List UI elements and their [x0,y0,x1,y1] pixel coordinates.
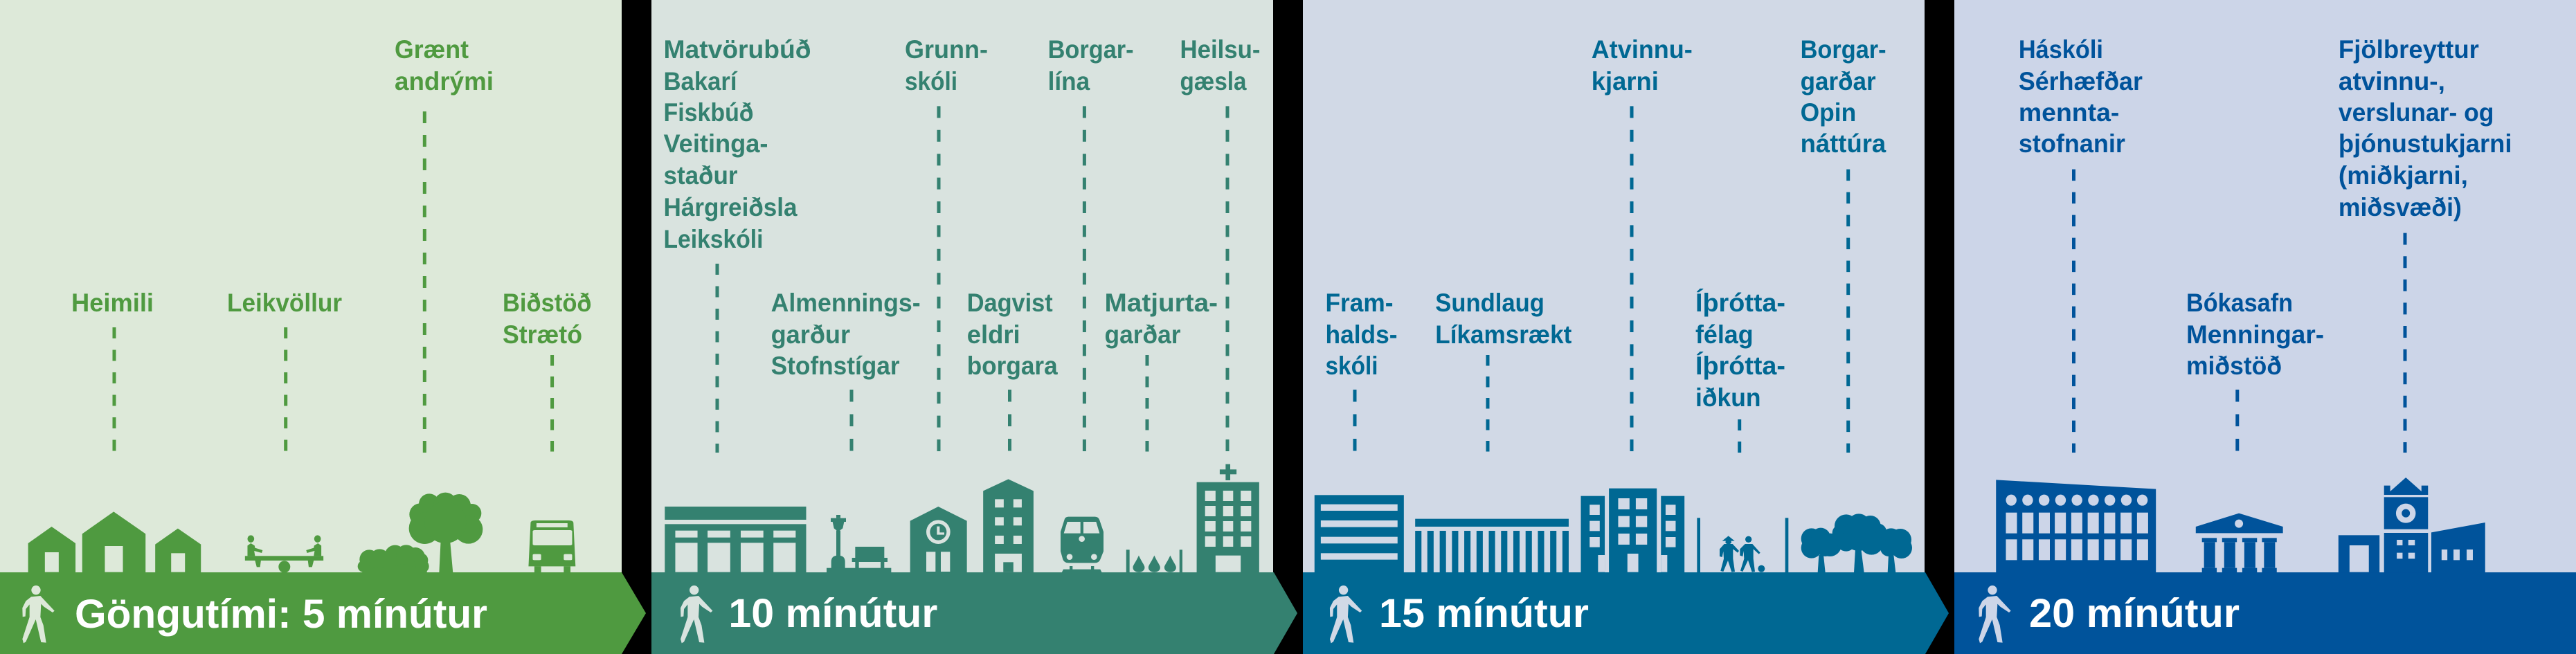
label: Matjurtagarðar: garðar [1105,320,1181,349]
label: Bókasafn Menningarmiðstöð: Menningar- [2186,320,2324,349]
leader line: Grænt andrými [423,111,426,453]
label: Framhaldsskóli: skóli [1325,352,1378,380]
label: Háskóli Sérhæfðar menntastofnanir: mennta- [2019,98,2119,127]
icon: university [1996,480,2156,572]
label: Grunnskóli: Grunn- [905,35,988,64]
icon: swimming hall [1415,519,1569,572]
leader line: Bókasafn [2235,390,2239,453]
label: shops list: Fiskbúð [663,98,753,127]
label: Borgarlína: Borgar- [1048,35,1134,64]
leader line: Leikvöllur [284,327,287,453]
label: Borgarlína [1048,35,1134,96]
label: Heilsugæsla: gæsla [1180,67,1247,96]
icon: park trees [1801,514,1912,572]
banner heading: 20 mínútur [2029,591,2240,636]
leader line: Háskóli [2072,170,2075,453]
label: Bókasafn Menningarmiðstöð: miðstöð [2186,352,2282,380]
label: Fjölbreyttur kjarni: verslunar- og [2339,98,2494,127]
icon: town centre with clock tower [2339,478,2485,572]
label: Íþróttafélag Íþróttaiðkun [1695,289,1785,412]
leader line: Atvinnukjarni [1630,106,1634,453]
banner arrow: Göngutími 5 mínútur [0,572,646,654]
label: Biðstöð Strætó [503,289,591,349]
leader line: Íþróttafélag [1738,419,1741,453]
label: Heilsugæsla [1180,35,1260,96]
icon: train [1061,517,1104,573]
icon: bush and tree [358,493,483,573]
leader line: Framhaldsskóli [1353,390,1357,453]
label: Borgarlína: lína [1048,67,1090,96]
icons: sports and park [1697,514,1912,573]
leader line: Biðstöð [550,355,554,453]
label: Borgargarðar Opin náttúra: náttúra [1801,129,1886,158]
label: Íþróttafélag Íþróttaiðkun: iðkun [1695,383,1761,412]
panel: 5 minutes [0,0,646,654]
panel: 15 minutes [1303,0,1949,654]
label: Biðstöð Strætó: Biðstöð [503,289,591,317]
label: Háskóli Sérhæfðar menntastofnanir: stofnanir [2019,129,2125,158]
icon: seesaw playground [245,535,323,573]
label: Atvinnukjarni: Atvinnu- [1592,35,1693,64]
label: Íþróttafélag Íþróttaiðkun: félag [1695,320,1754,349]
label: Háskóli Sérhæfðar menntastofnanir: Háskóli [2019,35,2103,64]
label: shops list: Bakarí [663,67,738,96]
panel: 20 minutes [1954,0,2576,654]
label: Fjölbreyttur kjarni [2339,35,2512,221]
label: Almenningsgarður Stofnstígar [771,289,921,380]
label: shops list [663,35,811,253]
label: Dagvist eldri borgara [967,289,1058,380]
icon: walking person [22,585,55,643]
banner heading: Göngutími: 5 mínútur [75,592,487,637]
icons: panel 4 skyline [1996,478,2485,572]
leader line: Almenningsgarður [850,390,853,453]
icon: hospital [1197,464,1259,572]
label: Fjölbreyttur kjarni: (miðkjarni, [2339,161,2468,190]
leader line: Heilsugæsla [1225,106,1230,453]
label: Heimili: Heimili [71,289,154,317]
label: Framhaldsskóli [1325,289,1397,380]
icon: vegetable garden [1126,549,1182,572]
label: Atvinnukjarni [1592,35,1693,96]
label: Grunnskóli [905,35,988,96]
leader line: Fjölbreyttur [2404,233,2406,453]
label: Íþróttafélag Íþróttaiðkun: Íþrótta- [1695,289,1785,317]
banner: 20 mínútur [1954,572,2576,654]
icon: library [2196,514,2283,572]
label: Sundlaug Líkamsrækt [1435,289,1571,349]
label: Fjölbreyttur kjarni: Fjölbreyttur [2339,35,2479,64]
label: Framhaldsskóli: halds- [1325,320,1397,349]
label: Fjölbreyttur kjarni: atvinnu-, [2339,67,2445,96]
banner heading: 10 mínútur [728,591,937,636]
label: Leikvöllur: Leikvöllur [227,289,342,317]
label: Háskóli Sérhæfðar menntastofnanir: Sérhæfðar [2019,67,2143,96]
label: Almenningsgarður Stofnstígar: Stofnstígar [771,352,900,380]
label: Grænt andrými [395,35,494,96]
banner arrow: 15 mínútur [1303,572,1949,654]
leader line: Borgargarðar [1846,170,1850,453]
label: Sundlaug Líkamsrækt: Líkamsrækt [1435,320,1571,349]
leader line: Grunnskóli [937,106,940,453]
icon: clock building [910,507,967,573]
label: Biðstöð Strætó: Strætó [503,320,582,349]
icons: panel 1 skyline [28,511,575,573]
label: Grænt andrými: andrými [395,67,494,96]
icon: tree [409,493,483,573]
panel: 10 minutes [651,0,1297,654]
icon: sports field with people [1697,518,1788,573]
label: Íþróttafélag Íþróttaiðkun: Íþrótta- [1695,352,1785,380]
label: Atvinnukjarni: kjarni [1592,67,1659,96]
label: shops list: Leikskóli [663,225,763,253]
label: Dagvist eldri borgara: Dagvist [967,289,1053,317]
icon: office towers [1581,489,1684,572]
label: shops list: Hárgreiðsla [663,193,798,221]
label: Borgargarðar Opin náttúra [1801,35,1886,158]
leader line: Dagvist [1008,390,1011,453]
leader line: shops [716,264,719,453]
label: Framhaldsskóli: Fram- [1325,289,1393,317]
label: Fjölbreyttur kjarni: miðsvæði) [2339,193,2462,221]
icon: bush [358,545,429,573]
label: Almenningsgarður Stofnstígar: garður [771,320,850,349]
leader line: Borgarlína [1083,106,1086,453]
banner arrow: 10 mínútur [651,572,1297,654]
icon: walking person [1330,585,1362,643]
icon: street lamp and bench [827,515,891,573]
leader line: Sundlaug [1486,355,1490,453]
icon: school building [1315,495,1404,572]
icon: bus [528,520,575,572]
icons: lamp, bench, clock building, train [827,507,1104,573]
label: Dagvist eldri borgara: eldri [967,320,1020,349]
label: Almenningsgarður Stofnstígar: Almennings- [771,289,921,317]
icon: shop [665,507,806,572]
label: Matjurtagarðar [1105,289,1218,349]
icons: panel 3 skyline [1315,489,1684,572]
label: Grænt andrými: Grænt [395,35,469,64]
label: Matjurtagarðar: Matjurta- [1105,289,1218,317]
label: shops list: Matvörubúð [663,35,811,64]
leader line: Heimili [112,327,116,453]
icon: walking person [681,585,712,643]
icon: houses [28,511,201,572]
icon: walking person [1979,585,2011,643]
label: Grunnskóli: skóli [905,67,957,96]
label: Dagvist eldri borgara: borgara [967,352,1058,380]
label: Bókasafn Menningarmiðstöð: Bókasafn [2186,289,2293,317]
label: Borgargarðar Opin náttúra: Opin [1801,98,1856,127]
label: Bókasafn Menningarmiðstöð [2186,289,2324,380]
label: Borgargarðar Opin náttúra: Borgar- [1801,35,1886,64]
label: Fjölbreyttur kjarni: þjónustukjarni [2339,129,2512,158]
label: Háskóli Sérhæfðar menntastofnanir [2019,35,2143,158]
label: Heilsugæsla: Heilsu- [1180,35,1260,64]
label: Borgargarðar Opin náttúra: garðar [1801,67,1876,96]
label: shops list: Veitinga- [663,129,768,158]
leader line: Matjurtagarðar [1145,355,1149,453]
label: shops list: staður [663,161,738,190]
icons: panel 2 skyline [665,464,1259,572]
icon: tall building [983,479,1034,572]
banner heading: 15 mínútur [1379,591,1589,636]
label: Sundlaug Líkamsrækt: Sundlaug [1435,289,1544,317]
